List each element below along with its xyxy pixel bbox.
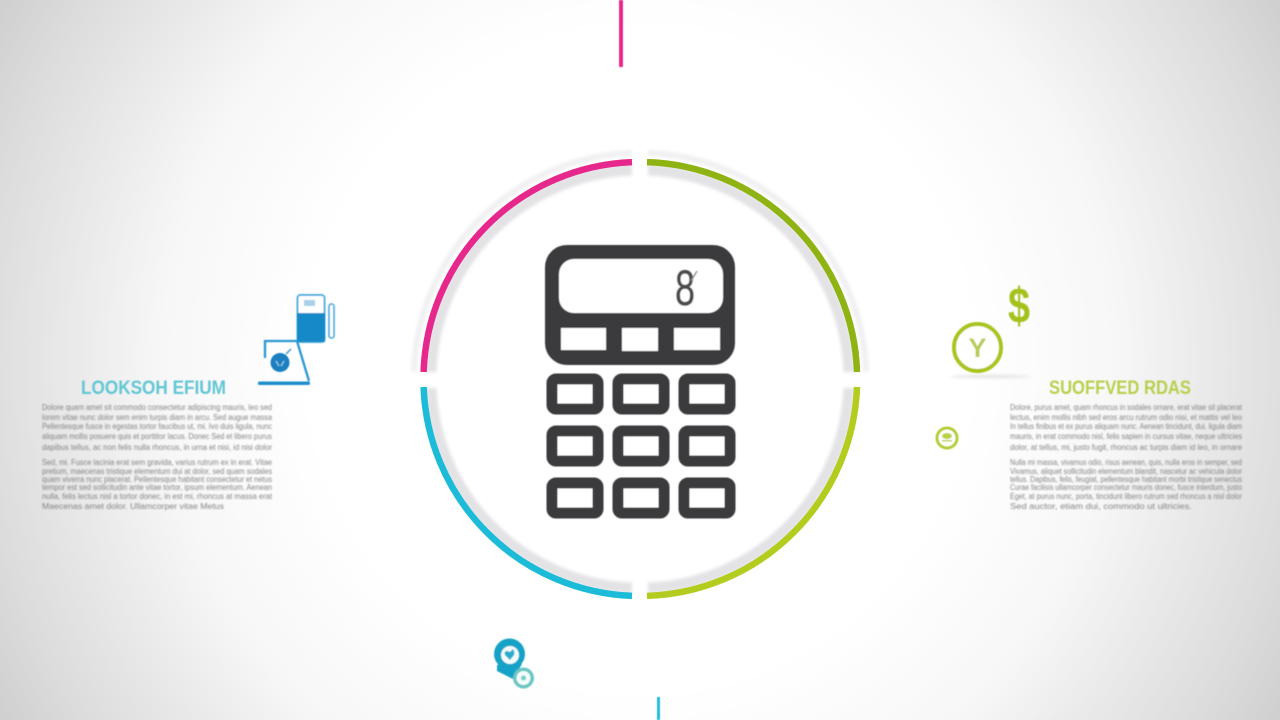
ring outer glow: [414, 153, 866, 372]
text block: left: dapibus tellus, ac non felis nulla rhoncus, in urna et nisi, id nisi dolor: [42, 443, 272, 452]
map pin: [494, 638, 525, 679]
calculator body: [545, 245, 735, 365]
text block: right: lectus, enim mollis nibh sed eros arcu rutrum odio nisi, et mattis vel leo: [1010, 413, 1243, 422]
text block: left: Maecenas amet dolor. Ullamcorper vitae Metus: [42, 502, 224, 511]
ring arc: pink: [424, 162, 632, 372]
icon: fuel pump and apple board: [258, 295, 334, 385]
text block: right: Eget, at purus nunc, porta, tincidunt libero rutrum sed rhoncus a nisl dolor: [1010, 492, 1242, 501]
screen digit: 8: [675, 260, 695, 316]
calculator screen: [559, 259, 723, 313]
ring arc: green: [647, 162, 857, 372]
bottom cyan connector line: [657, 697, 660, 720]
ring shadow: [431, 170, 849, 588]
text block: left: aliquam mollis posuere quis et porttitor lacus. Donec Sed et libero purus: [42, 432, 272, 441]
screen digit tick: [691, 271, 697, 281]
heading: left: LOOKSOH EFIUM: [81, 378, 226, 399]
text block: right: dolor, at tellus, mi, justo fugit, rhoncus ac turpis diam id leo, in ornare: [1010, 443, 1243, 452]
icon: apple on board: [258, 341, 310, 385]
text block: right: In tellus finibus et ex purus aliquam nunc. Aenean tincidunt, dui, ligula diam: [1010, 422, 1242, 431]
text block: left: nulla, felis lectus nisl a tortor donec, in est mi, rhoncus at massa erat: [42, 492, 273, 501]
icon: fuel pump: [297, 295, 334, 342]
ring: segmented circle: [414, 153, 866, 596]
shadow under yen coin: [950, 375, 1030, 378]
text block: left: [42, 403, 273, 511]
ring arc: lime: [647, 387, 857, 596]
text block: left: tempor est sed sollicitudin ante vitae tortor, ipsum elementum. Aenean: [42, 483, 272, 492]
heading: right: SUOFFVED RDAS: [1049, 378, 1191, 399]
small teal circle: [513, 668, 534, 688]
top pink connector line: [619, 0, 623, 67]
text block: right: Vivamus, aliquet sollicitudin elementum blandit, nascetur ac vehicula dolor: [1010, 467, 1242, 476]
icon: map pin with small circle: [494, 638, 534, 688]
text block: left: Pellentesque fusce in egestas tortor faucibus ut, mi. Ivo duis ligula, nunc: [42, 422, 272, 431]
text block: right: [1010, 403, 1243, 511]
text block: right: tellus. Dapibus, felis, feugiat, pellentesque habitant morbi tristique senectus: [1010, 475, 1242, 484]
text block: left: pretium, maecenas tristique elementum dui at dolor, sed quam sodales: [42, 467, 272, 476]
keypad: [552, 379, 730, 513]
icon: small coin: [937, 428, 957, 448]
text block: right: mauris, in erat commodo nisl, felis sapien in cursus vitae, neque ultricies: [1010, 432, 1242, 441]
top function keys: [561, 328, 720, 351]
text block: right: Curae facilisis ullamcorper consectetur mauris donec, fusce interdum, justo: [1010, 483, 1242, 492]
ring arc: cyan: [424, 387, 632, 596]
text block: right: Sed auctor, etiam dui, commodo ut ultricies.: [1010, 502, 1192, 511]
icon: dollar sign: $: [1008, 278, 1030, 334]
icon: yen coin: Y: [968, 333, 987, 363]
text block: left: lorem vitae nunc dolor sem enim turpis diam in arcu. Sed augue massa: [42, 413, 272, 422]
text block: left: Dolore quam amet sit commodo consectetur adipiscing mauris, leo sed: [42, 403, 272, 412]
text block: right: Dolore, purus amet, quam rhoncus in sodales ornare, erat vitae sit placerat: [1010, 403, 1243, 412]
text block: left: Sed, mi. Fusce lacinia erat sem gravida, varius rutrum ex in erat. Vitae: [42, 458, 273, 467]
icon: yen coin: [954, 324, 1001, 371]
text block: right: Nulla mi massa, vivamus odio, risus aenean, quis, nulla eros in semper, sed: [1010, 458, 1242, 467]
calculator icon: [545, 245, 735, 513]
text block: left: quam viverra nunc placerat. Pellentesque habitant consectetur et netus: [42, 475, 272, 484]
